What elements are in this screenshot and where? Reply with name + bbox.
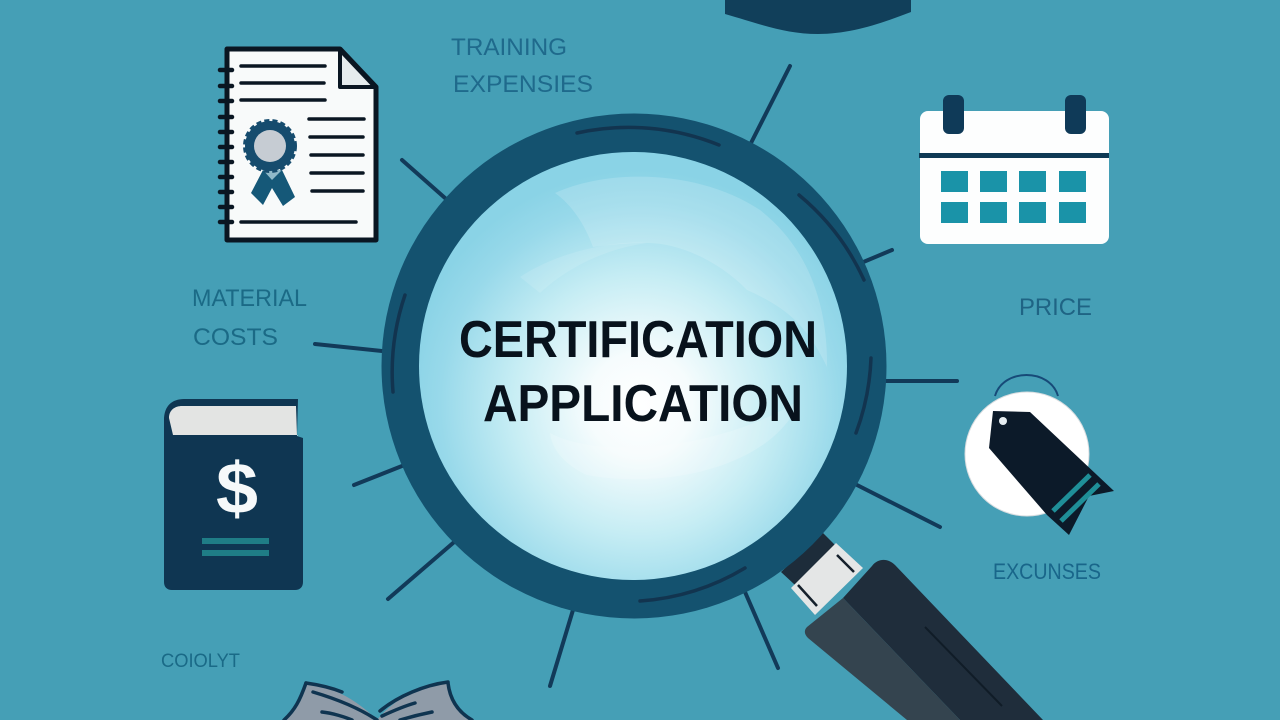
icon: open book bbox=[284, 682, 472, 720]
lens glass bbox=[419, 152, 847, 580]
label: price: PRICE bbox=[1019, 294, 1092, 321]
label: material costs: MATERIAL bbox=[192, 285, 307, 312]
label: material costs: COSTS bbox=[193, 324, 278, 351]
icon: rosette seal bbox=[245, 121, 295, 206]
label: training expenses bbox=[451, 34, 593, 98]
ring accent marks bbox=[392, 127, 871, 601]
title text: APPLICATION bbox=[483, 375, 803, 433]
lens highlights bbox=[520, 177, 827, 479]
label: training expenses: TRAINING bbox=[451, 34, 567, 61]
icon: calendar bbox=[919, 95, 1109, 244]
label: excunses: EXCUNSES bbox=[993, 559, 1101, 584]
label: material costs bbox=[192, 285, 307, 351]
title text bbox=[459, 311, 817, 433]
label: coiolyt: COIOLYT bbox=[161, 651, 240, 672]
icon: book with dollar sign bbox=[164, 399, 303, 590]
icon: certificate document bbox=[220, 49, 376, 240]
magnifying glass bbox=[382, 114, 1043, 720]
icon: price tag bbox=[965, 375, 1114, 535]
title text: CERTIFICATION bbox=[459, 311, 817, 369]
handle bbox=[781, 533, 1043, 720]
icon: dollar sign: $ bbox=[216, 449, 258, 529]
lens ring bbox=[382, 114, 886, 618]
label: training expenses: EXPENSIES bbox=[453, 71, 593, 98]
radiating lines bbox=[315, 66, 957, 686]
icon: partial dark shape at top bbox=[725, 0, 911, 34]
